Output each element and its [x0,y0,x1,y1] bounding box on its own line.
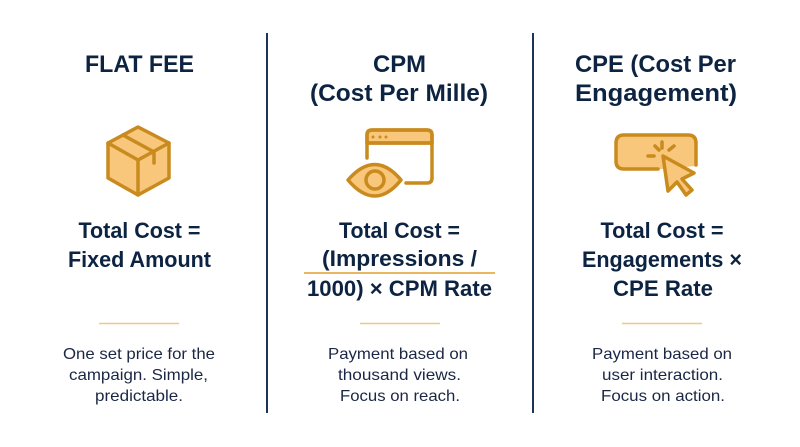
icon: package box [108,127,169,195]
formula: CPE [582,218,742,301]
formula: flat fee: Fixed Amount [68,247,212,272]
icon: browser window with eye [348,130,432,196]
description: CPE [592,346,732,405]
formula: CPM: 1000) × CPM Rate [307,276,492,301]
formula: CPE: Total Cost = [600,218,724,243]
description: flat fee [63,346,215,405]
description: CPE: user interaction. [602,367,723,384]
formula: flat fee [68,218,212,272]
heading: CPE [575,51,737,107]
description: flat fee: predictable. [95,388,183,405]
formula: flat fee: Total Cost = [78,218,200,243]
formula: CPM: (Impressions / [322,246,477,271]
formula: CPM: Total Cost = [339,218,460,243]
description: CPE: Payment based on [592,346,732,363]
description: flat fee: One set price for the [63,346,215,363]
heading: CPM: (Cost Per Mille) [310,80,488,107]
description: CPM: Focus on reach. [340,388,460,405]
heading: flat fee: FLAT FEE [85,51,194,78]
heading: CPM: CPM [373,51,426,78]
formula: CPM [304,218,495,301]
icon: button with cursor [616,135,696,195]
panel: flat fee [63,51,215,405]
description: CPM: Payment based on [328,346,468,363]
heading: CPM [310,51,488,107]
heading: CPE: Engagement) [575,80,737,107]
description: flat fee: campaign. Simple, [69,367,208,384]
heading: CPE: CPE (Cost Per [575,51,736,78]
description: CPE: Focus on action. [601,388,725,405]
panel: CPM [304,51,495,405]
description: CPM [328,346,468,405]
formula: CPE: Engagements × [582,247,742,272]
description: CPM: thousand views. [338,367,461,384]
panel: CPE [575,51,742,405]
formula: CPE: CPE Rate [613,276,713,301]
